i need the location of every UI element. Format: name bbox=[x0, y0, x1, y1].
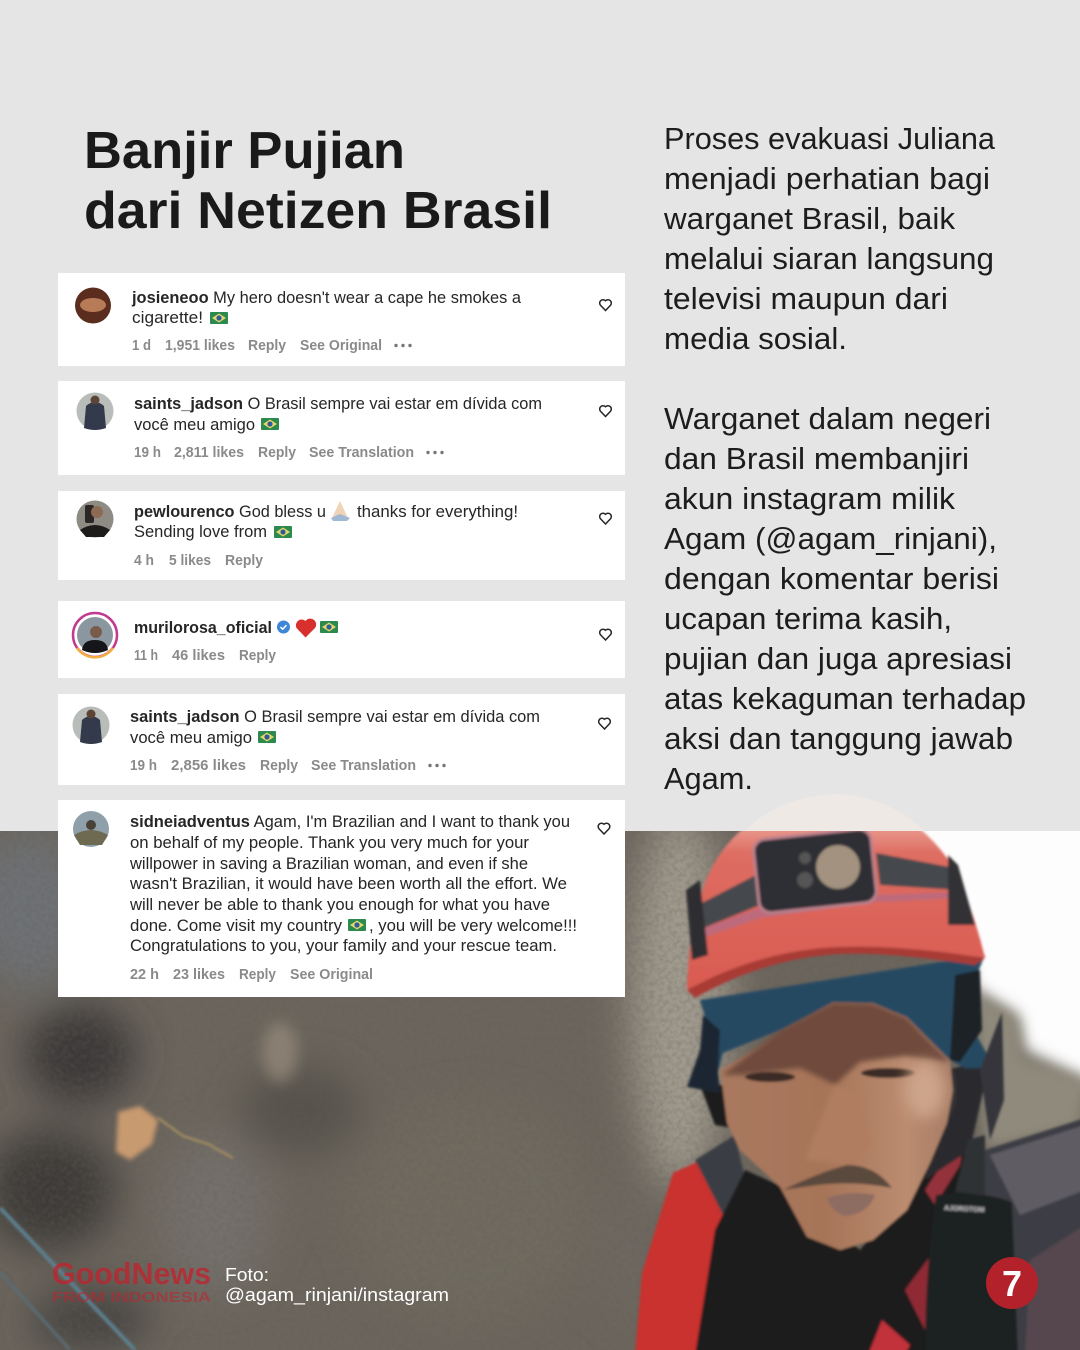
text block: netizen paragraph: dengan komentar berisi bbox=[664, 561, 999, 596]
comment card: sidneiadventus bbox=[58, 800, 625, 997]
text block: netizen paragraph: pujian dan juga apresiasi bbox=[664, 641, 1012, 676]
comment card: sidneiadventus: Reply bbox=[239, 967, 276, 983]
comment card: sidneiadventus: on behalf of my people. Thank you very much for your bbox=[130, 834, 530, 852]
photo credit: Foto: bbox=[225, 1264, 269, 1285]
cloth bbox=[700, 955, 995, 1072]
comment card: sidneiadventus: wasn't Brazilian, it would have been worth all the effort. We bbox=[129, 875, 567, 893]
comment card: murilorosa_oficial: murilorosa_oficial bbox=[134, 619, 272, 637]
comment card: josieneoo bbox=[58, 273, 625, 366]
text block: netizen paragraph bbox=[664, 401, 1026, 796]
comment card: saints_jadson 2: Reply bbox=[260, 758, 298, 774]
comment card: saints_jadson 2: 19 h bbox=[130, 758, 157, 774]
photo credit: @agam_rinjani/instagram bbox=[225, 1284, 449, 1306]
text block: evacuation paragraph: menjadi perhatian bagi bbox=[664, 161, 990, 196]
comment card: sidneiadventus: sidneiadventus Agam, I'm Brazilian and I want to thank you bbox=[130, 813, 570, 831]
comment card: sidneiadventus: , you will be very welcome!!! bbox=[369, 917, 577, 935]
comment card: saints_jadson 1: 19 h bbox=[134, 445, 161, 461]
text block: netizen paragraph: ucapan terima kasih, bbox=[664, 601, 952, 636]
comment card: sidneiadventus: done. Come visit my country bbox=[130, 917, 343, 935]
text block: evacuation paragraph: media sosial. bbox=[664, 321, 847, 356]
comment card: sidneiadventus: willpower in saving a Brazilian woman, and even if she bbox=[129, 855, 528, 873]
comment card: pewlourenco: pewlourenco God bless u bbox=[134, 503, 326, 521]
text block: evacuation paragraph: televisi maupun dari bbox=[664, 281, 948, 316]
text block: netizen paragraph: dan Brasil membanjiri bbox=[664, 441, 969, 476]
comment card: josieneoo: 1,951 likes bbox=[165, 338, 235, 354]
comment card: saints_jadson 2 bbox=[58, 694, 625, 785]
title: dari Netizen Brasil bbox=[84, 182, 552, 240]
rock highlight bbox=[116, 1022, 298, 1160]
comment card: josieneoo: josieneoo My hero doesn't wear a cape he smokes a bbox=[131, 289, 522, 307]
comment card: pewlourenco: thanks for everything! bbox=[357, 503, 518, 521]
radio bbox=[980, 1012, 1004, 1140]
text block: evacuation paragraph: melalui siaran langsung bbox=[664, 241, 994, 276]
cables bbox=[0, 1208, 135, 1350]
comment card: josieneoo: 1 d bbox=[132, 338, 151, 354]
comment card: pewlourenco: Reply bbox=[225, 553, 263, 569]
text block: evacuation paragraph: Proses evakuasi Juliana bbox=[664, 121, 996, 156]
comment card: pewlourenco: 4 h bbox=[134, 553, 154, 569]
comment card: sidneiadventus: 23 likes bbox=[173, 967, 225, 983]
moustache and mouth bbox=[783, 1165, 892, 1190]
comment card: murilorosa_oficial: 11 h bbox=[134, 648, 158, 664]
bright sky bbox=[920, 831, 1080, 1085]
comment card: saints_jadson 2: você meu amigo bbox=[130, 729, 252, 747]
text block: evacuation paragraph bbox=[663, 121, 996, 356]
title bbox=[84, 122, 552, 240]
photo: rescuer portrait bbox=[635, 795, 1080, 1350]
logo: GoodNews from Indonesia: FROM INDONESIA bbox=[52, 1289, 211, 1306]
comment card: pewlourenco bbox=[58, 491, 625, 580]
text block: netizen paragraph: Warganet dalam negeri bbox=[664, 401, 991, 436]
comment card: josieneoo: See Original bbox=[300, 338, 382, 354]
comment card: saints_jadson 1 bbox=[58, 381, 625, 475]
comment card: saints_jadson 1: você meu amigo bbox=[134, 416, 255, 434]
comment card: murilorosa_oficial: Reply bbox=[239, 648, 276, 664]
comment card: murilorosa_oficial: 46 likes bbox=[172, 648, 225, 664]
comment card: josieneoo: Reply bbox=[248, 338, 286, 354]
helmet bbox=[686, 831, 986, 990]
comment card: josieneoo: cigarette! bbox=[132, 309, 203, 327]
photo: rescuer portrait: AJOROTOM bbox=[944, 1205, 985, 1214]
comment card: saints_jadson 2: 2,856 likes bbox=[171, 758, 246, 774]
logo: GoodNews from Indonesia bbox=[52, 1256, 211, 1306]
photo credit bbox=[225, 1264, 449, 1306]
text block: evacuation paragraph: warganet Brasil, baik bbox=[663, 201, 956, 236]
comment card: sidneiadventus: Congratulations to you, your family and your rescue team. bbox=[130, 937, 557, 955]
text block: netizen paragraph: aksi dan tanggung jawab bbox=[664, 721, 1013, 756]
page number badge: 7 bbox=[1002, 1263, 1022, 1304]
photo: rock wall background bbox=[0, 800, 1080, 1350]
text block: netizen paragraph: Agam (@agam_rinjani), bbox=[664, 521, 997, 556]
page number badge bbox=[986, 1257, 1038, 1309]
helmet glow above photo bbox=[745, 794, 925, 831]
comment card: sidneiadventus: See Original bbox=[290, 967, 373, 983]
backpack bbox=[984, 1118, 1080, 1350]
comment card: saints_jadson 2: See Translation bbox=[311, 758, 416, 774]
face bbox=[720, 1002, 953, 1250]
comment card: saints_jadson 1: saints_jadson O Brasil sempre vai estar em dívida com bbox=[134, 395, 542, 413]
helmet strap bbox=[700, 874, 760, 929]
comment card: sidneiadventus: 22 h bbox=[130, 967, 159, 983]
jacket bbox=[635, 1150, 740, 1350]
comment card: saints_jadson 1: See Translation bbox=[309, 445, 414, 461]
text block: netizen paragraph: atas kekaguman terhadap bbox=[664, 681, 1026, 716]
comment card: pewlourenco: Sending love from bbox=[134, 523, 267, 541]
text block: netizen paragraph: Agam. bbox=[664, 761, 753, 796]
comment card: sidneiadventus: will never be able to thank you enough for what you have bbox=[129, 896, 550, 914]
title: Banjir Pujian bbox=[84, 122, 405, 180]
comment card: saints_jadson 1: 2,811 likes bbox=[174, 445, 244, 461]
comment card: saints_jadson 2: saints_jadson O Brasil sempre vai estar em dívida com bbox=[130, 708, 540, 726]
comment card: murilorosa_oficial bbox=[58, 601, 625, 678]
headlamp bbox=[752, 828, 878, 914]
comment card: pewlourenco: 5 likes bbox=[169, 553, 211, 569]
text block: netizen paragraph: akun instagram milik bbox=[664, 481, 956, 516]
logo: GoodNews from Indonesia: GoodNews bbox=[52, 1256, 211, 1291]
neck hair bbox=[700, 1084, 730, 1129]
comment card: saints_jadson 1: Reply bbox=[258, 445, 296, 461]
